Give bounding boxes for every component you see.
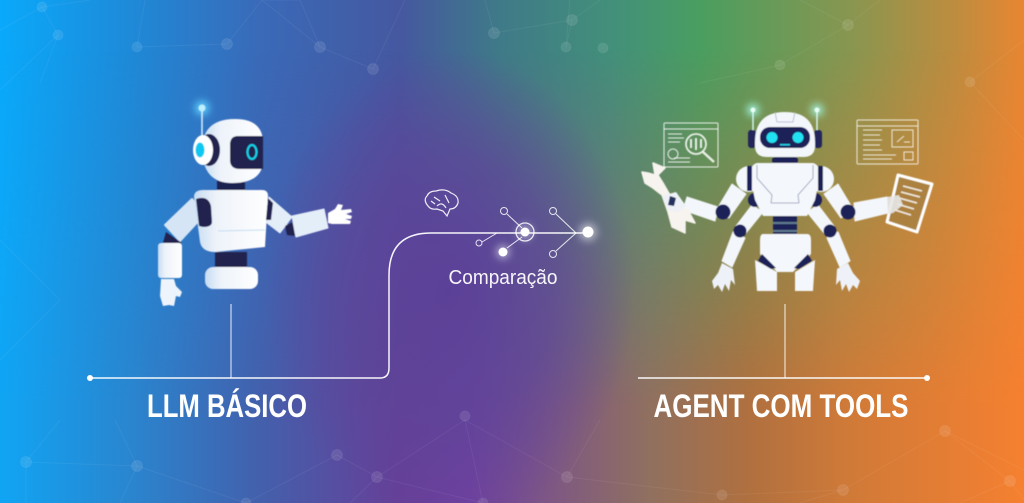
node: central hub xyxy=(516,223,534,241)
line: agent connector xyxy=(638,304,930,381)
robot upper arms xyxy=(683,184,888,267)
label: LLM básico: LLM BÁSICO xyxy=(147,388,307,424)
node: lower glowing xyxy=(496,245,510,259)
panel: chart window xyxy=(857,120,918,164)
robot right arm xyxy=(266,197,352,237)
robot hands xyxy=(712,263,860,292)
icon: antennas xyxy=(747,104,823,130)
robot legs xyxy=(755,234,815,291)
icon: tablet xyxy=(887,175,932,232)
robot joints xyxy=(716,193,856,238)
icon: wrench in hand xyxy=(642,163,695,233)
robot torso xyxy=(194,190,268,252)
icon: brain xyxy=(425,190,458,216)
robot head xyxy=(193,119,263,183)
robot waist xyxy=(205,252,258,289)
robot: agent com tools xyxy=(642,104,932,292)
robot left arm xyxy=(158,199,204,306)
comparison network diagram xyxy=(476,208,597,259)
robot torso xyxy=(736,163,834,236)
robot neck xyxy=(217,180,245,192)
label: comparação: Comparação xyxy=(448,267,558,289)
robot head xyxy=(748,112,822,164)
robot: LLM básico xyxy=(158,101,352,306)
node: end point xyxy=(579,223,597,241)
line: LLM básico connector xyxy=(87,233,588,381)
icon: antenna xyxy=(195,101,209,140)
label: agent com tools: AGENT COM TOOLS xyxy=(654,388,908,424)
panel: search window xyxy=(664,123,718,167)
